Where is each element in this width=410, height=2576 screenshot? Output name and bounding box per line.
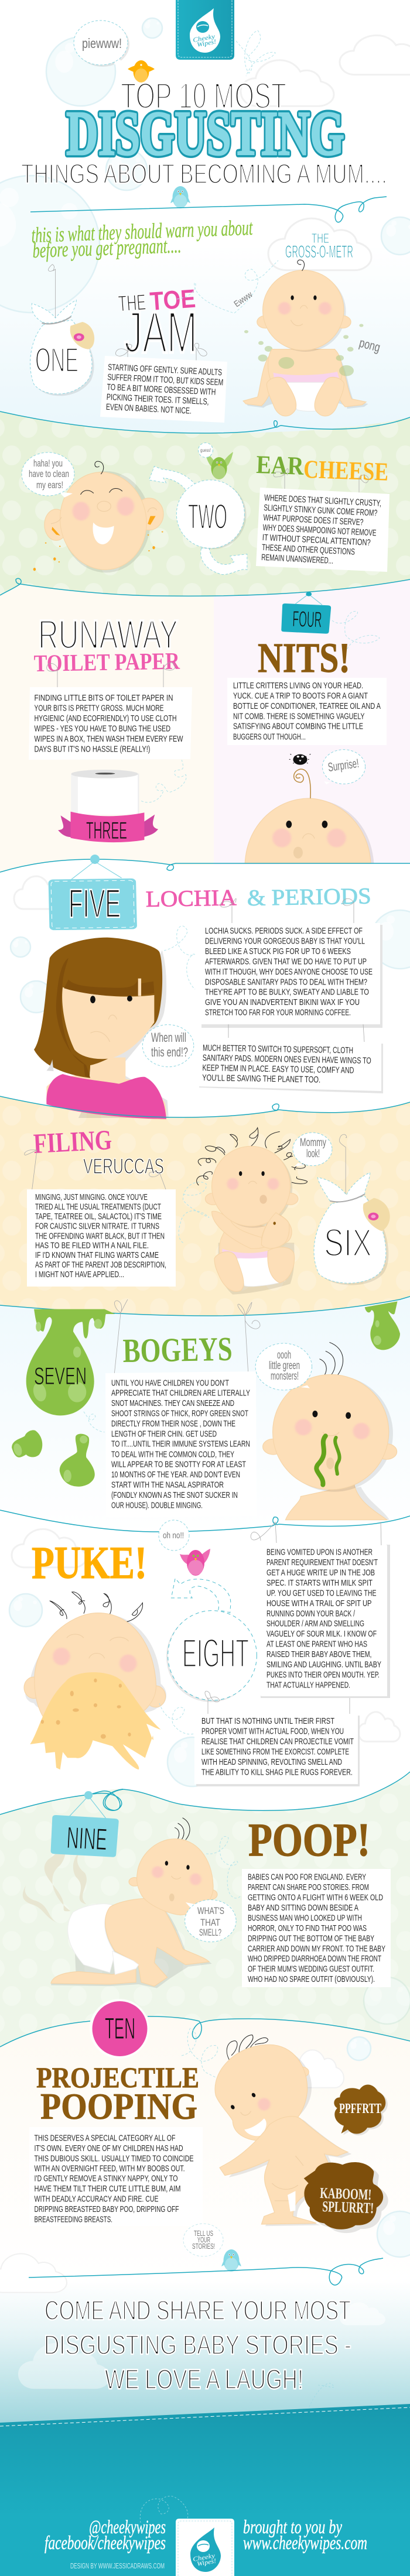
number badge: eight with arrow bbox=[166, 1579, 257, 1702]
logo tag bottom: Wipes! bbox=[196, 2557, 217, 2568]
title bbox=[21, 76, 387, 189]
heading: the toe jam bbox=[115, 284, 207, 365]
text box: projectile pooping: HAVE THEM TILT THEIR CUTE LITTLE BUM, AIM bbox=[34, 2184, 180, 2194]
speech bubble: haha bbox=[22, 452, 74, 498]
text box: filing: THE OFFENDING WART BLACK, BUT IT THEN bbox=[35, 1231, 165, 1241]
speech bubble: piewww: piewww! bbox=[82, 36, 122, 51]
baby: gross-o-metr bbox=[233, 260, 382, 416]
woman illustration bbox=[34, 938, 169, 1120]
text box: filing: TAPE, TEATREE OIL, SALACTOL) IT'S TIME bbox=[35, 1212, 162, 1222]
text box: lochia one bbox=[200, 923, 382, 1028]
text box: toe jam: TO BE A BIT MORE OBSESSED WITH bbox=[107, 382, 216, 397]
number badge: eight with arrow: EIGHT bbox=[182, 1631, 249, 1676]
splat: ppffrtt: PPFFRTT bbox=[339, 2101, 381, 2117]
speech bubble: piewww bbox=[74, 20, 129, 67]
green slime drips and seven: SEVEN bbox=[34, 1362, 87, 1390]
heading: lochia and periods bbox=[145, 883, 371, 912]
cloud: gross-o-metr: THE bbox=[312, 231, 329, 246]
text box: bogeys: TO IT....UNTIL THEIR IMMUNE SYSTEMS LEARN bbox=[111, 1439, 250, 1449]
number badge: ten bbox=[90, 1999, 149, 2059]
logo tag top bbox=[176, 0, 234, 60]
number badge: two with arrows bbox=[149, 467, 247, 575]
text box: bogeys: START WITH THE NASAL ASPIRATOR bbox=[111, 1480, 224, 1490]
sign: five: FIVE bbox=[69, 881, 121, 926]
text box: poop bbox=[242, 1869, 391, 1987]
text box: nits: BUGGERS OUT THOUGH... bbox=[233, 732, 306, 742]
section line three bbox=[0, 855, 410, 872]
text box: toilet paper: DAYS BUT IT'S NO HASSLE (REALLY!) bbox=[34, 744, 150, 754]
baby: crawling: SMELL? bbox=[199, 1927, 221, 1938]
text box: puke one: AT LEAST ONE PARENT WHO HAS bbox=[266, 1639, 367, 1649]
text box: filing: IF I'D KNOWN THAT FILING WARTS CAME bbox=[35, 1250, 159, 1260]
section line six bbox=[0, 1296, 410, 1316]
strings: eight bbox=[205, 1522, 381, 1715]
strings: lochia bbox=[220, 898, 354, 925]
heading: lochia and periods: LOCHIA bbox=[145, 885, 237, 912]
text box: bogeys: SHOOT STRINGS OF THICK, ROPY GREEN SNOT bbox=[111, 1408, 248, 1418]
text box: projectile pooping: THIS DESERVES A SPECIAL CATEGORY ALL OF bbox=[34, 2133, 176, 2143]
text box: puke one: THAT ACTUALLY HAPPENED. bbox=[266, 1680, 350, 1690]
text box: filing: I MIGHT NOT HAVE APPLIED... bbox=[35, 1270, 124, 1280]
baby: gross-o-metr: Ewww bbox=[233, 290, 254, 309]
speech bubble: when will this end bbox=[142, 1025, 194, 1067]
text box: toilet paper: FINDING LITTLE BITS OF TOILET PAPER IN bbox=[34, 693, 173, 703]
sack: six bbox=[314, 1134, 390, 1285]
text box: nits: LITTLE CRITTERS LIVING ON YOUR HEAD. bbox=[233, 681, 363, 691]
text box: filing: HAS TO BE FILED WITH A NAIL FILE. bbox=[35, 1241, 149, 1251]
number badge: two with arrows: TWO bbox=[188, 497, 227, 536]
speech bubble: tell us your stories: TELL US bbox=[194, 2229, 213, 2238]
splat: ppffrtt bbox=[334, 2084, 388, 2135]
speech bubble: haha: haha! you bbox=[33, 458, 63, 469]
speech bubble: haha: my ears! bbox=[36, 479, 63, 490]
text box: projectile pooping: I'D GENTLY REMOVE A STINKY NAPPY, ONLY TO bbox=[34, 2174, 178, 2184]
footer contact text bbox=[45, 2517, 166, 2570]
section line seven bbox=[0, 1510, 410, 1532]
text box: toe jam: STARTING OFF GENTLY. SURE ADULTS bbox=[108, 362, 222, 378]
speech bubble: oh no: oh no!! bbox=[163, 1531, 184, 1541]
footer brought to you by: brought to you by bbox=[243, 2517, 342, 2538]
baby: bogeys: monsters! bbox=[271, 1370, 299, 1383]
bird: blue closing bbox=[221, 2249, 241, 2272]
title: TOP 10 MOST bbox=[121, 76, 286, 116]
text box: bogeys: LENGTH OF THEIR CHIN. GET USED bbox=[111, 1429, 217, 1439]
bird: orange bbox=[128, 60, 155, 83]
heading: filing veruccas bbox=[33, 1124, 164, 1178]
text box: toilet paper: WIPES - YES YOU HAVE TO BUNG THE USED bbox=[34, 723, 170, 733]
section line eight bbox=[0, 1772, 410, 1814]
text box: puke two: BUT THAT IS NOTHING UNTIL THEIR FIRST bbox=[201, 1716, 334, 1726]
green slime drips and seven bbox=[12, 1301, 400, 1487]
subtitle: before you get pregnant.... bbox=[32, 234, 182, 263]
sack: one bbox=[30, 265, 94, 396]
text box: bogeys: 10 MONTHS OF THE YEAR. AND DON'T EVEN bbox=[111, 1470, 240, 1480]
text box: bogeys: TO DEAL WITH THE COMMON COLD, THEY bbox=[111, 1449, 234, 1459]
text box: ear cheese bbox=[256, 488, 390, 572]
text box: toe jam: SUFFER FROM IT TOO, BUT KIDS SEEM bbox=[107, 372, 224, 387]
text box: puke one: HOUSE WITH A TRAIL OF SPIT UP bbox=[266, 1599, 371, 1608]
heading: puke: PUKE! bbox=[32, 1537, 147, 1588]
text box: nits: SATISFYING ABOUT COMBING THE LITTLE bbox=[233, 722, 363, 732]
splat: kaboom bbox=[304, 2162, 388, 2233]
baby: crawling: THAT bbox=[200, 1917, 220, 1928]
dashed flourish five bbox=[164, 926, 195, 989]
baby: bogeys bbox=[255, 1342, 397, 1520]
heading: ear cheese bbox=[255, 450, 389, 486]
baby: puke bbox=[24, 1592, 166, 1769]
heading: the toe jam: THE bbox=[118, 290, 147, 317]
footer contact text: facebook/cheekywipes bbox=[45, 2533, 166, 2554]
strings: lochia two bbox=[228, 1024, 364, 1042]
text box: bogeys: (FONDLY KNOWN AS THE SNOT SUCKER IN bbox=[111, 1490, 238, 1500]
text box: projectile pooping: IT'S OWN. EVERY ONE OF MY CHILDREN HAS HAD bbox=[34, 2143, 183, 2153]
strings: toilet paper bbox=[47, 663, 175, 691]
sign: nine: NINE bbox=[66, 1821, 108, 1857]
text box: projectile pooping: WITH DEADLY ACCURACY AND FIRE. CUE bbox=[34, 2194, 158, 2204]
speech bubble: tell us your stories: YOUR bbox=[197, 2235, 210, 2244]
heading: projectile pooping: PROJECTILE bbox=[36, 2061, 199, 2094]
footer contact text: DESIGN BY WWW.JESSICADRAWS.COM bbox=[70, 2561, 165, 2570]
dashed flourish four bbox=[332, 611, 380, 653]
dashed flourish one bbox=[177, 260, 278, 313]
bird: blue on line bbox=[170, 186, 190, 208]
toilet roll with three ribbon: THREE bbox=[86, 817, 127, 844]
dashed flourish eight bbox=[159, 1703, 194, 1734]
bird: green bbox=[205, 452, 233, 479]
tightrope line closing bbox=[29, 2258, 383, 2285]
dashed flourish nine bbox=[206, 1836, 240, 1898]
sack: six: SIX bbox=[324, 1221, 372, 1265]
sack: one: ONE bbox=[35, 341, 78, 379]
text box: lochia one: BLEED LIKE A STUCK PIG FOR UP TO 6 WEEKS bbox=[205, 946, 351, 956]
text box: projectile pooping: THIS DUBIOUS SKILL. USUALLY TIMED TO COINCIDE bbox=[34, 2154, 193, 2164]
text box: bogeys bbox=[105, 1371, 257, 1517]
text box: lochia two: KEEP THEM IN PLACE. EASY TO USE, COMFY AND bbox=[202, 1063, 354, 1076]
logo tag top: Cheeky bbox=[192, 33, 216, 44]
heading: poop: POOP! bbox=[248, 1814, 370, 1866]
speech bubble: tell us your stories bbox=[183, 2224, 224, 2257]
footer brought to you by bbox=[243, 2517, 367, 2554]
speech bubble: when will this end: When will bbox=[151, 1030, 186, 1045]
heading: nits: NITS! bbox=[258, 634, 350, 681]
baby head: nits with spider: Surprise! bbox=[327, 757, 360, 774]
baby: gross-o-metr: pong bbox=[358, 335, 382, 355]
text box: bogeys: OUR HOUSE). DOUBLE MINGING. bbox=[111, 1500, 203, 1510]
text box: projectile pooping bbox=[29, 2127, 203, 2226]
text box: poop: BABY AND SITTING DOWN BESIDE A bbox=[248, 1903, 358, 1913]
text box: bogeys: DIRECTLY FROM THEIR NOSE , DOWN THE bbox=[111, 1419, 235, 1429]
tightrope line bbox=[30, 197, 387, 222]
text box: toilet paper: YOUR BITS IS PRETTY GROSS. MUCH MORE bbox=[34, 703, 164, 713]
text box: puke two: WITH HEAD SPINNING, REVOLTING SMELL AND bbox=[201, 1757, 342, 1767]
text box: toe jam bbox=[100, 356, 227, 423]
text box: puke two bbox=[194, 1714, 360, 1786]
speech bubble: haha: have to clean bbox=[29, 468, 69, 479]
section line one bbox=[0, 411, 410, 433]
heading: lochia and periods: & PERIODS bbox=[247, 883, 371, 911]
sign: nine bbox=[51, 1789, 123, 1857]
speech bubble: tell us your stories: STORIES! bbox=[192, 2242, 215, 2251]
number badge: ten: TEN bbox=[105, 2012, 135, 2045]
heading: runaway toilet paper: RUNAWAY bbox=[38, 612, 178, 657]
text box: puke two: THE ABILITY TO KILL SHAG PILE RUGS FOREVER. bbox=[201, 1767, 353, 1777]
strings: ear cheese bbox=[274, 469, 368, 495]
text box: nits bbox=[227, 678, 387, 745]
text box: puke two: PROPER VOMIT WITH ACTUAL FOOD, WHEN YOU bbox=[201, 1727, 344, 1737]
text box: bogeys: APPRECIATE THAT CHILDREN ARE LITERALLY bbox=[111, 1388, 250, 1398]
text box: lochia one: GIVE YOU AN INADVERTENT BIKINI WAX IF YOU bbox=[205, 997, 360, 1007]
heading: projectile pooping bbox=[36, 2061, 199, 2127]
closing call to action bbox=[44, 2295, 351, 2395]
baby: projectile bbox=[215, 2035, 351, 2226]
baby head: nits with spider bbox=[245, 750, 374, 863]
heading: filing veruccas: FILING bbox=[33, 1124, 112, 1160]
text box: toilet paper: WIPES IN A BOX, THEN WASH THEM EVERY FEW bbox=[34, 734, 183, 744]
heading: the toe jam: JAM bbox=[124, 300, 197, 365]
text box: toilet paper bbox=[29, 687, 192, 760]
text box: toe jam: EVEN ON BABIES. NOT NICE. bbox=[106, 402, 192, 416]
baby face: ear cheese bbox=[33, 461, 163, 572]
text box: toe jam: PICKING THEIR TOES. IT SMELLS, bbox=[106, 392, 209, 407]
text box: projectile pooping: BREASTFEEDING BREASTS. bbox=[34, 2215, 112, 2225]
logo tag bottom: Cheeky bbox=[192, 2553, 216, 2563]
text box: ear cheese: IT WITHOUT SPECIAL ATTENTION? bbox=[262, 533, 371, 548]
text box: puke one bbox=[261, 1545, 390, 1697]
heading: runaway toilet paper bbox=[33, 612, 180, 677]
bird: pink bbox=[180, 1549, 210, 1576]
footer contact text: @cheekywipes bbox=[89, 2517, 166, 2538]
text box: filing bbox=[27, 1189, 176, 1287]
text box: filing: AS PART OF THE PARENT JOB DESCRIPTION, bbox=[35, 1260, 166, 1270]
heading: ear cheese: EAR bbox=[256, 450, 305, 481]
baby: crawling: WHAT'S bbox=[197, 1905, 224, 1916]
text box: puke one: SPEC. IT STARTS WITH MILK SPIT bbox=[266, 1578, 373, 1588]
heading: runaway toilet paper: TOILET PAPER bbox=[33, 647, 180, 677]
heading: ear cheese: CHEESE bbox=[303, 455, 389, 486]
text box: ear cheese: REMAIN UNANSWERED... bbox=[261, 553, 334, 566]
text box: ear cheese: THESE AND OTHER QUESTIONS bbox=[262, 543, 355, 557]
speech bubble: oh no bbox=[159, 1520, 189, 1551]
sign: four bbox=[281, 592, 331, 634]
baby: bogeys: oooh bbox=[277, 1349, 291, 1361]
splat: kaboom: SPLURRT! bbox=[322, 2198, 374, 2217]
baby: bogeys: little green bbox=[269, 1360, 300, 1372]
subtitle: this is what they should warn you about bbox=[31, 216, 254, 248]
text box: puke one: RUNNING DOWN YOUR BACK / bbox=[266, 1608, 356, 1618]
sign: four: FOUR bbox=[292, 607, 322, 633]
cloud: gross-o-metr bbox=[268, 218, 371, 270]
text box: projectile pooping: WITH AN OVERNIGHT FEED, WITH MY BOOBS OUT. bbox=[34, 2163, 185, 2173]
baby: verucca: look! bbox=[306, 1148, 320, 1160]
logo tag top: Wipes! bbox=[196, 38, 217, 49]
strings: bogeys bbox=[114, 1299, 260, 1376]
strings: filing bbox=[25, 1150, 168, 1194]
text box: bogeys: WILL APPEAR TO BE SNOTTY FOR AT LEAST bbox=[111, 1460, 246, 1470]
subtitle bbox=[31, 216, 254, 263]
stink lines bbox=[23, 1832, 87, 1923]
text box: ear cheese: WHAT PURPOSE DOES IT SERVE? bbox=[263, 513, 364, 527]
text box: projectile pooping: DRIPPING BREASTFED BABY POO, DRIPPING OFF bbox=[34, 2204, 179, 2214]
closing call to action: WE LOVE A LAUGH! bbox=[105, 2364, 303, 2395]
speech bubble: guess bbox=[198, 443, 213, 458]
logo tag bottom bbox=[176, 2519, 234, 2576]
heading: bogeys: BOGEYS bbox=[122, 1330, 233, 1370]
dashed flourish ten bbox=[182, 2028, 218, 2078]
sign: five bbox=[48, 862, 137, 930]
heading: the toe jam: TOE bbox=[149, 284, 197, 316]
section line nine bbox=[0, 2016, 410, 2047]
baby: verucca bbox=[179, 1128, 332, 1295]
section line two bbox=[0, 578, 410, 596]
text box: puke one: SHOULDER / ARM AND SMELLING bbox=[266, 1619, 364, 1629]
heading: filing veruccas: VERUCCAS bbox=[83, 1154, 164, 1178]
text box: filing: MINGING, JUST MINGING. ONCE YOU'VE bbox=[35, 1192, 148, 1202]
speech bubble: when will this end: this end!? bbox=[151, 1045, 188, 1059]
text box: lochia two: YOU'LL BE SAVING THE PLANET TOO. bbox=[202, 1073, 320, 1085]
text box: filing: TRIED ALL THE USUAL TREATMENTS (DUCT bbox=[35, 1202, 161, 1212]
dashed flourish footer bbox=[140, 2383, 334, 2523]
baby: verucca: Mommy bbox=[300, 1137, 326, 1149]
heading: projectile pooping: POOPING bbox=[40, 2086, 197, 2127]
speech bubble: guess: guess! bbox=[200, 448, 211, 453]
section line five bbox=[0, 1096, 410, 1117]
splat: kaboom: KABOOM! bbox=[320, 2184, 372, 2203]
text box: toilet paper: HYGIENIC (AND ECOFRIENDLY) TO USE CLOTH bbox=[34, 714, 177, 723]
text box: bogeys: SNOT MACHINES. THEY CAN SNEEZE AND bbox=[111, 1398, 234, 1408]
toilet roll with three ribbon bbox=[58, 760, 186, 844]
text box: filing: FOR CAUSTIC SILVER NITRATE. IT TURNS bbox=[35, 1222, 159, 1232]
baby: crawling bbox=[51, 1818, 236, 1988]
text box: bogeys: UNTIL YOU HAVE CHILDREN YOU DON'T bbox=[111, 1378, 229, 1388]
text box: lochia two bbox=[198, 1039, 383, 1093]
